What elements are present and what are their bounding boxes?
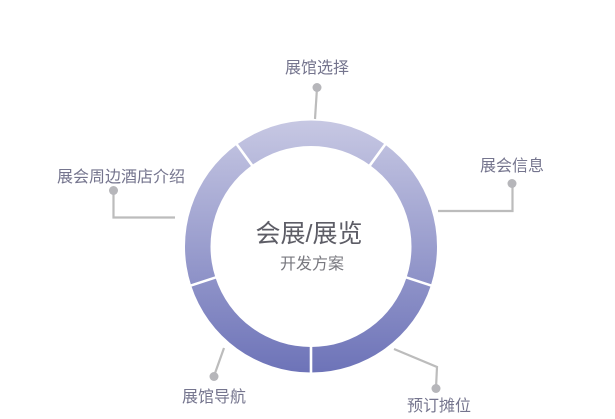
- label: 展馆导航: 展馆导航: [182, 388, 246, 406]
- connector: top: [312, 83, 322, 119]
- label: 展会信息: 展会信息: [480, 157, 544, 175]
- center subtitle: 开发方案: [280, 255, 344, 273]
- callout: 展馆导航: [182, 348, 246, 406]
- connector: left: [109, 186, 175, 218]
- segment: 展馆导航: [191, 278, 311, 372]
- label: 展会周边酒店介绍: 展会周边酒店介绍: [57, 168, 185, 186]
- callout: 预订摊位: [394, 349, 471, 415]
- segment: 预订摊位: [311, 278, 431, 372]
- label: 预订摊位: 预订摊位: [407, 397, 471, 415]
- connector: right: [438, 179, 516, 211]
- label: 展馆选择: 展馆选择: [285, 59, 349, 77]
- ring of five segments: [185, 120, 437, 374]
- segment: 展馆选择: [237, 120, 385, 165]
- connector: lower left: [210, 348, 224, 381]
- segment: 展会信息: [370, 145, 437, 285]
- connector: lower right: [394, 349, 440, 393]
- center title: 会展/展览: [256, 220, 362, 248]
- segment: 展会周边酒店介绍: [185, 145, 252, 285]
- callout: 展会周边酒店介绍: [57, 168, 185, 218]
- callout: 展会信息: [438, 157, 544, 211]
- callout: 展馆选择: [285, 59, 349, 119]
